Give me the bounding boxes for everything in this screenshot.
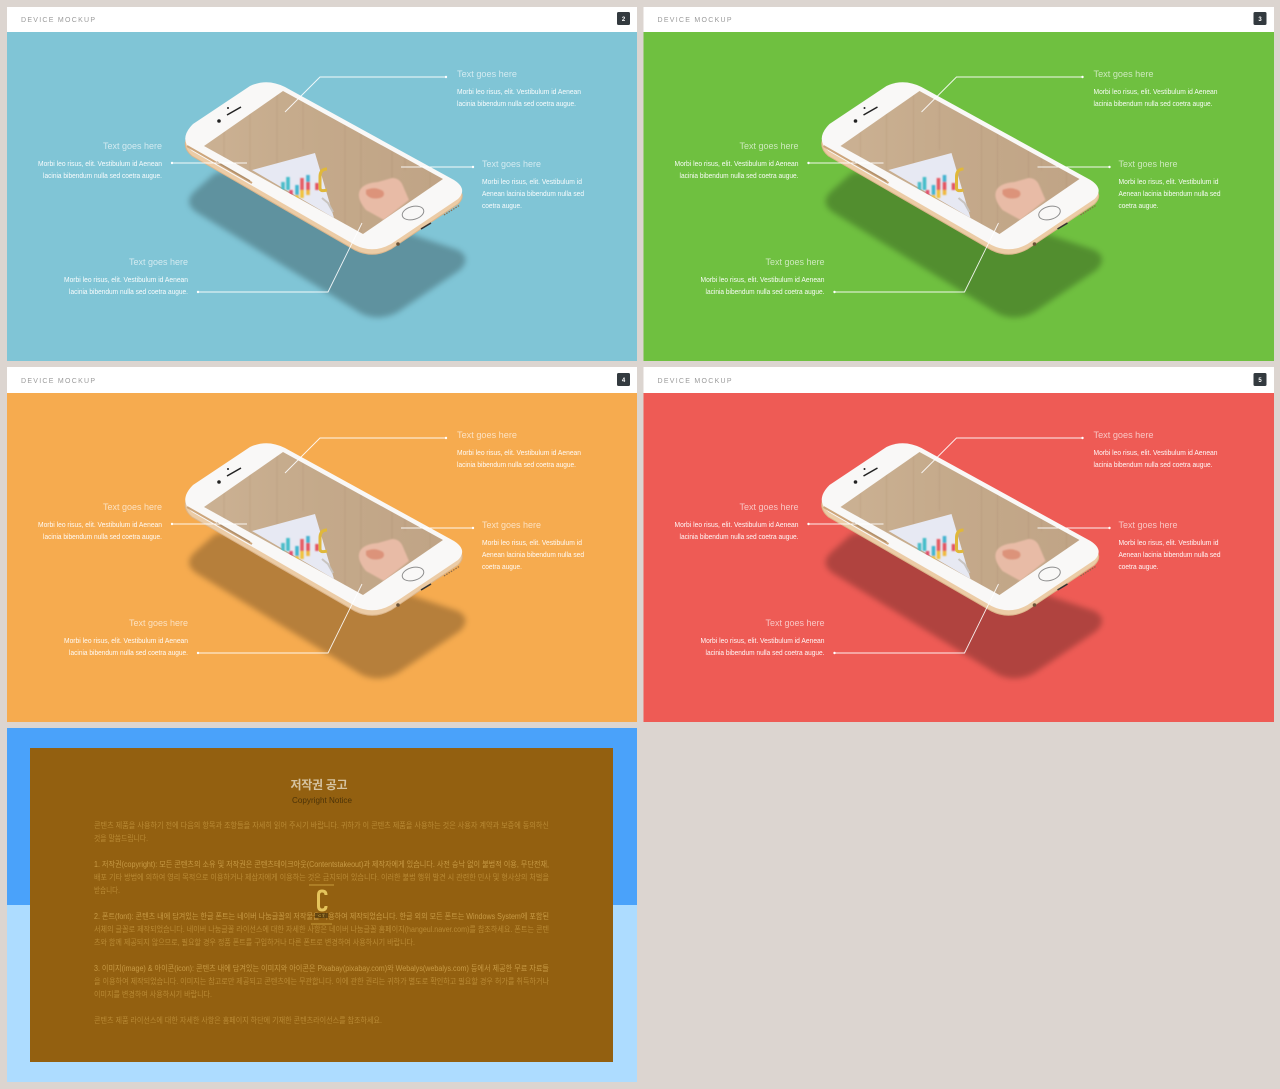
callout text: bottom left: Text goes here [766, 618, 824, 628]
callout text: right: Aenean lacinia bibendum nulla sed [1118, 191, 1221, 198]
callout text: top right: Morbi leo risus, elit. Vestibulum id Aenean [1094, 89, 1218, 96]
notice section 2: font: 서체의 글꼴로 제작되었습니다. 네이버 나눔글꼴 라이선스에 대한 자세한 사항은 네이버 나눔글꼴 홈페이지(hangeul.naver.com)를 참조하세요. 폰트는 콘텐 [94, 924, 549, 934]
callout text: top right: Text goes here [457, 430, 517, 440]
phone illustration [185, 82, 466, 318]
callout lines [807, 437, 1111, 654]
callout text: bottom left [700, 257, 825, 296]
page number badge [1254, 12, 1266, 25]
callout text: bottom left: lacinia bibendum nulla sed coetra augue. [706, 650, 825, 657]
callout text: bottom left: Text goes here [129, 257, 188, 267]
callout text: top right: Text goes here [1094, 430, 1154, 440]
callout text: top right [1094, 430, 1218, 469]
notice section 2: font: 2. 폰트(font): 콘텐츠 내에 담겨있는 한글 폰트는 네이버 나눔글꼴의 저작물을 이용하여 제작되었습니다. 한글 외의 모든 폰트는 Windows System에 포함된 [94, 911, 549, 921]
page number badge: 3 [1258, 17, 1262, 23]
notice section 1: copyright: 받습니다. [94, 885, 120, 895]
callout text: top right [457, 69, 581, 108]
callout text: left: Morbi leo risus, elit. Vestibulum id Aenean [674, 161, 799, 168]
phone illustration [822, 443, 1102, 679]
callout text: top right: Text goes here [457, 69, 517, 79]
callout text: bottom left: lacinia bibendum nulla sed coetra augue. [69, 650, 188, 657]
notice section 1: copyright: 1. 저작권(copyright): 모든 콘텐츠의 소유 및 저작권은 콘텐츠테이크아웃(Contentstakeout)과 제작자에게 있습니다. 사전 승낙 없이 불법적 이용, 무단전재, [94, 859, 549, 869]
notice closing line: 콘텐츠 제품 라이선스에 대한 자세한 사항은 홈페이지 하단에 기재한 콘텐츠라이선스를 참조하세요. [94, 1015, 382, 1025]
callout text: bottom left [64, 618, 188, 657]
watermark logo [309, 885, 334, 924]
callout text: right [1118, 159, 1221, 210]
page number badge: 4 [622, 378, 626, 384]
callout lines [171, 437, 474, 654]
callout text: top right: lacinia bibendum nulla sed coetra augue. [1094, 462, 1213, 469]
watermark logo: C T [318, 913, 325, 918]
callout text: top right: Morbi leo risus, elit. Vestibulum id Aenean [457, 450, 581, 457]
notice section 2: font [94, 911, 549, 947]
callout text: top right: Morbi leo risus, elit. Vestibulum id Aenean [457, 89, 581, 96]
callout text: top right: lacinia bibendum nulla sed coetra augue. [457, 462, 576, 469]
callout text: right: Morbi leo risus, elit. Vestibulum id [482, 540, 582, 547]
callout text: right: coetra augue. [482, 203, 522, 210]
callout text: left: Morbi leo risus, elit. Vestibulum id Aenean [38, 522, 162, 529]
callout text: bottom left: Morbi leo risus, elit. Vestibulum id Aenean [700, 277, 825, 284]
page number badge [617, 12, 630, 25]
header label: DEVICE MOCKUP [21, 17, 95, 24]
callout text: top right [1094, 69, 1218, 108]
panel: red device mockup [644, 367, 1274, 722]
callout text: right: Morbi leo risus, elit. Vestibulum id [1118, 540, 1219, 547]
callout text: left: lacinia bibendum nulla sed coetra augue. [43, 173, 162, 180]
panel: blue device mockup [7, 7, 637, 361]
page number badge: 2 [622, 17, 626, 23]
callout text: left: Text goes here [740, 502, 798, 512]
phone illustration [185, 443, 466, 679]
callout text: bottom left: Morbi leo risus, elit. Vestibulum id Aenean [700, 638, 825, 645]
page number badge [617, 373, 630, 386]
callout text: bottom left [64, 257, 188, 296]
callout text: bottom left: Morbi leo risus, elit. Vestibulum id Aenean [64, 277, 188, 284]
header label: DEVICE MOCKUP [658, 17, 732, 24]
callout text: right: coetra augue. [1118, 564, 1159, 571]
callout text: top right: lacinia bibendum nulla sed coetra augue. [457, 101, 576, 108]
callout text: right: coetra augue. [1118, 203, 1159, 210]
notice section 2: font: 츠와 함께 제공되지 않으므로, 필요할 경우 정품 폰트를 구입하거나 다른 폰트로 변경하여 사용하시기 바랍니다. [94, 937, 415, 947]
callout text: right: Morbi leo risus, elit. Vestibulum id [482, 179, 582, 186]
callout text: bottom left: Morbi leo risus, elit. Vestibulum id Aenean [64, 638, 188, 645]
callout text: left [674, 141, 799, 180]
callout text: right: Text goes here [1118, 159, 1178, 169]
callout text: left: Morbi leo risus, elit. Vestibulum id Aenean [38, 161, 162, 168]
callout text: right: Text goes here [482, 159, 541, 169]
callout text: left: Morbi leo risus, elit. Vestibulum id Aenean [674, 522, 799, 529]
panel: copyright notice [7, 728, 637, 1082]
callout text: right: Aenean lacinia bibendum nulla sed [482, 191, 584, 198]
notice title: 저작권 공고 [290, 777, 348, 792]
callout text: right: Text goes here [482, 520, 541, 530]
notice intro paragraph: 콘텐츠 제품을 사용하기 전에 다음의 항목과 조항들을 자세히 읽어 주시기 바랍니다. 귀하가 이 콘텐츠 제품을 사용하는 것은 사용자 계약과 보증에 동의하신 [94, 820, 549, 830]
callout text: right [482, 159, 584, 210]
callout text: left [38, 502, 162, 541]
notice section 3: image and icon [94, 963, 550, 999]
callout text: left: Text goes here [103, 141, 162, 151]
callout text: bottom left: Text goes here [766, 257, 824, 267]
page number badge: 5 [1258, 378, 1262, 384]
callout text: top right [457, 430, 581, 469]
phone illustration [822, 82, 1102, 318]
notice intro paragraph: 것을 말씀드립니다. [94, 833, 148, 843]
callout text: left: Text goes here [740, 141, 798, 151]
header label: DEVICE MOCKUP [658, 378, 732, 385]
callout text: right: Morbi leo risus, elit. Vestibulum id [1118, 179, 1219, 186]
callout text: right [1118, 520, 1221, 571]
callout text: right: coetra augue. [482, 564, 522, 571]
panel: orange device mockup [7, 367, 637, 722]
callout text: right: Aenean lacinia bibendum nulla sed [1118, 552, 1221, 559]
notice section 1: copyright [94, 859, 549, 895]
callout text: bottom left: lacinia bibendum nulla sed coetra augue. [69, 289, 188, 296]
callout text: right: Aenean lacinia bibendum nulla sed [482, 552, 584, 559]
callout text: left: Text goes here [103, 502, 162, 512]
header label: DEVICE MOCKUP [21, 378, 95, 385]
callout text: left [38, 141, 162, 180]
callout text: left: lacinia bibendum nulla sed coetra augue. [43, 534, 162, 541]
callout text: left [674, 502, 799, 541]
notice section 3: image and icon: 을 이용하여 제작되었습니다. 이미지는 참고로만 제공되고 콘텐츠에는 무관합니다. 이에 관한 권리는 귀하가 별도로 확인하고 필요할 경우 허가를 취득하거나 [94, 976, 550, 986]
page number badge [1254, 373, 1266, 386]
callout text: bottom left: lacinia bibendum nulla sed coetra augue. [706, 289, 825, 296]
callout text: left: lacinia bibendum nulla sed coetra augue. [680, 173, 799, 180]
callout text: top right: Text goes here [1094, 69, 1154, 79]
callout text: right [482, 520, 584, 571]
callout text: right: Text goes here [1118, 520, 1178, 530]
panel: green device mockup [644, 7, 1274, 361]
callout text: top right: lacinia bibendum nulla sed coetra augue. [1094, 101, 1213, 108]
notice subtitle: Copyright Notice [292, 795, 352, 805]
notice intro paragraph [94, 820, 549, 843]
callout text: top right: Morbi leo risus, elit. Vestibulum id Aenean [1094, 450, 1218, 457]
callout text: bottom left: Text goes here [129, 618, 188, 628]
callout text: left: lacinia bibendum nulla sed coetra augue. [680, 534, 799, 541]
notice section 3: image and icon: 3. 이미지(image) & 아이콘(icon): 콘텐츠 내에 담겨있는 이미지와 아이콘은 Pixabay(pixabay.com)와 Webalys(webalys.com) 등에서 제공한 무료 자료들 [94, 963, 549, 973]
callout lines [807, 76, 1111, 293]
callout lines [171, 76, 474, 293]
callout text: bottom left [700, 618, 825, 657]
notice section 3: image and icon: 이미지를 변경하여 사용하시기 바랍니다. [94, 989, 212, 999]
notice section 1: copyright: 배포 기타 방법에 의하여 영리 목적으로 이용하거나 제삼자에게 이용하는 것은 금지되어 있습니다. 이러한 불법 행위 발견 시 관련한 민사 및 형사상의 처벌을 [94, 872, 549, 882]
